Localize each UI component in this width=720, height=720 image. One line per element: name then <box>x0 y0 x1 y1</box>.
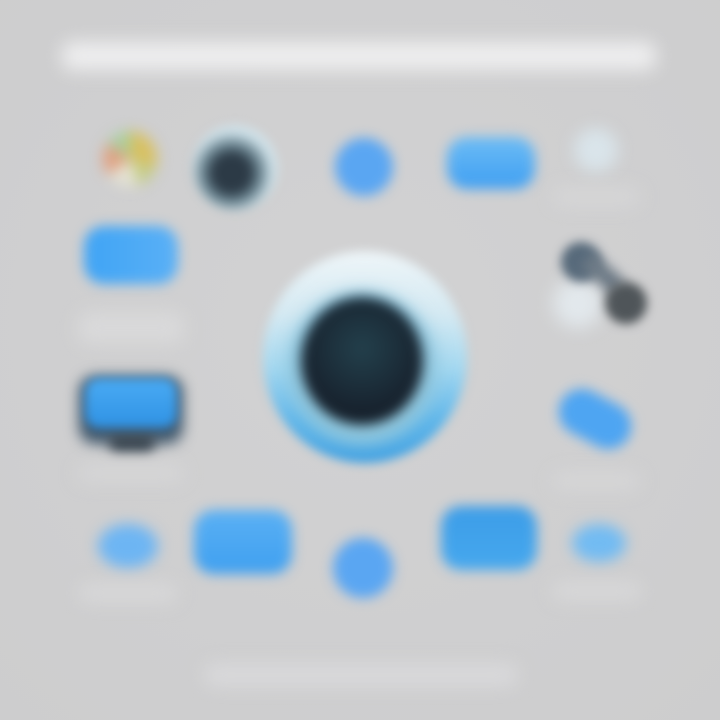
icon: bottom left circle <box>98 524 158 568</box>
icon: linked dark circles <box>550 236 654 331</box>
lens dark core <box>301 297 423 425</box>
icon: link bar <box>580 252 626 296</box>
caption: left lower <box>78 464 184 482</box>
icon: pale circle <box>574 128 618 172</box>
caption: left upper <box>78 312 184 344</box>
icon: bottom right circle <box>572 524 626 562</box>
icon: multicolour logo <box>103 131 157 187</box>
icon: pale link halo <box>553 278 603 328</box>
caption: right lower <box>552 472 640 490</box>
icon: lower dark circle <box>605 282 647 324</box>
icon: tilted blue pill <box>551 381 639 457</box>
title <box>62 42 656 70</box>
footer text <box>204 664 518 686</box>
icon: blue pill left <box>84 226 178 284</box>
icon: blue pill top <box>447 137 535 189</box>
caption: bottom right <box>552 582 642 600</box>
icon: bottom blue circle <box>333 538 393 598</box>
icon: bottom wide pill <box>194 510 292 574</box>
icon: blue circle top <box>335 138 393 196</box>
icon: dark lens <box>192 125 278 211</box>
icon: upper dark circle <box>561 242 601 282</box>
monitor shadow <box>79 376 183 444</box>
icon: blue monitor <box>68 365 194 460</box>
caption: bottom left <box>78 584 178 602</box>
icon: central lens <box>259 248 471 470</box>
monitor base <box>109 434 155 452</box>
monitor screen <box>85 378 177 428</box>
lens outer ring <box>263 251 467 463</box>
lens inner shade <box>287 291 437 445</box>
icon: bottom monitor <box>441 506 537 570</box>
caption: top right <box>552 188 640 206</box>
